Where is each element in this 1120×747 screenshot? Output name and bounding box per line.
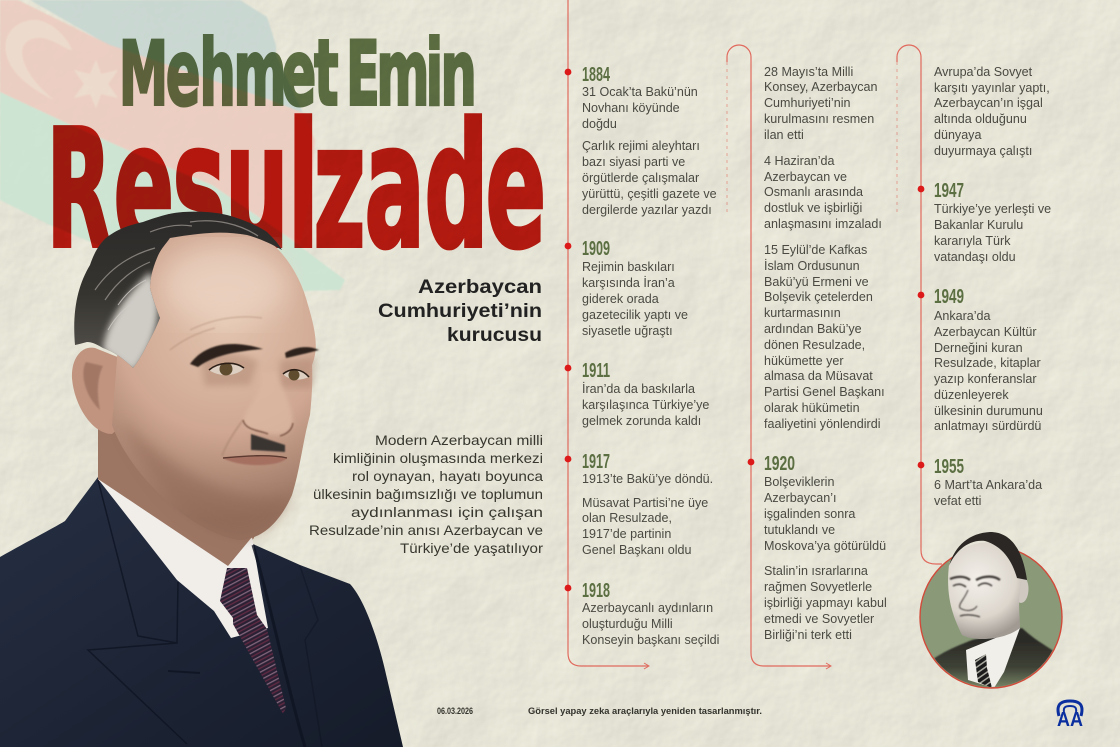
description paragraph: ülkesinin bağımsızlığı ve toplumun (313, 486, 543, 502)
mouth (223, 456, 287, 465)
1918: Azerbaycanlı aydınların (582, 601, 713, 615)
1918 continued: Bakü’yü Ermeni ve (764, 275, 869, 289)
1920: Azerbaycan’ı (764, 491, 837, 505)
1917: olan Resulzade, (582, 511, 672, 525)
1947: vatandaşı oldu (934, 250, 1016, 264)
face (112, 222, 316, 540)
1884: örgütlerde çalışmalar (582, 171, 699, 185)
1917: Genel Başkanı oldu (582, 543, 692, 557)
icon: AA logo: AA (1057, 709, 1083, 731)
1918 continued: dönen Resulzade, (764, 338, 865, 352)
1909: Rejimin baskıları (582, 260, 675, 274)
1918 continued: kurulmasını resmen (764, 112, 874, 126)
1918 continued: Konsey, Azerbaycan (764, 80, 877, 94)
1918 continued: hükümette yer (764, 354, 844, 368)
1918 continued: Partisi Genel Başkanı (764, 385, 885, 399)
collar and shirt (98, 479, 268, 638)
1955: 1955 (934, 456, 964, 478)
1909: 1909 (582, 238, 610, 260)
hair (949, 532, 1027, 580)
tie (975, 654, 992, 688)
subtitle: Azerbaycan (418, 276, 542, 298)
1949: ülkesinin durumunu (934, 404, 1043, 418)
1917: 1913’te Bakü’ye döndü. (582, 472, 713, 486)
cheek and jaw shading (120, 420, 292, 538)
1884: yürüttü, çeşitli gazete ve (582, 187, 717, 201)
lapels (88, 480, 322, 747)
1918 continued: anlaşmasını imzaladı (764, 217, 882, 231)
Azerbaijani flag watercolor (0, 0, 345, 292)
nose (243, 372, 293, 435)
1917: 1917’de partinin (582, 527, 671, 541)
circle (920, 546, 1062, 688)
1884: Çarlık rejimi aleyhtarı (582, 139, 700, 153)
portrait: Mehmet Emin Resulzade (0, 205, 403, 747)
ear (72, 348, 128, 434)
1918 continued: Cumhuriyeti’nin (764, 96, 850, 110)
1909 (582, 238, 688, 338)
neck (98, 420, 258, 568)
title: Resulzade: Resulzade (46, 88, 546, 287)
1920 continued (934, 65, 1050, 158)
subtitle: Cumhuriyeti’nin (378, 300, 542, 322)
1918 continued: Azerbaycan ve (764, 170, 847, 184)
1918 continued: almasa da Müsavat (764, 369, 873, 383)
1918 continued: Osmanlı arasında (764, 185, 863, 199)
description paragraph: Modern Azerbaycan milli (375, 432, 543, 448)
1955: vefat etti (934, 494, 981, 508)
1918 (582, 580, 719, 647)
1909: giderek orada (582, 292, 659, 306)
features (950, 577, 1000, 617)
title: Mehmet Emin: Mehmet Emin (119, 22, 477, 127)
1947: 1947 (934, 180, 964, 202)
1918: Konseyin başkanı seçildi (582, 633, 719, 647)
grey temple patch (103, 272, 158, 372)
subtitle (378, 276, 542, 346)
1884: doğdu (582, 117, 617, 131)
1949: Derneğini kuran (934, 341, 1023, 355)
1949: anlatmayı sürdürdü (934, 419, 1041, 433)
description paragraph: rol oynayan, hayatı boyunca (352, 468, 543, 484)
1955: 6 Mart’ta Ankara’da (934, 478, 1042, 492)
1920: 1920 (764, 453, 795, 475)
1947: Bakanlar Kurulu (934, 218, 1023, 232)
head (948, 542, 1020, 639)
1920: tutuklandı ve (764, 523, 835, 537)
description paragraph (309, 432, 543, 556)
description paragraph: aydınlanması için çalışan (351, 504, 543, 520)
timeline line: column 1 (568, 0, 649, 669)
1920 continued: Avrupa’da Sovyet (934, 65, 1033, 79)
suit (0, 477, 403, 747)
1920: Bolşeviklerin (764, 475, 834, 489)
1920: Moskova’ya götürüldü (764, 539, 886, 553)
1884: 31 Ocak’ta Bakü’nün (582, 85, 698, 99)
jacket (932, 628, 1055, 690)
1909: gazetecilik yaptı ve (582, 308, 688, 322)
1949 (934, 286, 1043, 433)
1884: Novhanı köyünde (582, 101, 680, 115)
1920 continued: karşıtı yayınlar yaptı, (934, 81, 1050, 95)
1955 (934, 456, 1042, 508)
description paragraph: kimliğinin oluşmasında merkezi (333, 450, 543, 466)
1949: Azerbaycan Kültür (934, 325, 1037, 339)
tie (220, 568, 286, 714)
1918 continued: Bolşevik çetelerden (764, 290, 873, 304)
1918 continued: ardından Bakü’ye (764, 322, 862, 336)
timeline column 1 (582, 64, 719, 647)
1911: 1911 (582, 360, 610, 382)
1920 (764, 453, 887, 642)
hair (74, 212, 282, 368)
1920: Stalin’in ısrarlarına (764, 564, 868, 578)
1920: etmedi ve Sovyetler (764, 612, 874, 626)
timeline line: column 3 (897, 45, 942, 564)
1949: 1949 (934, 286, 964, 308)
description paragraph: Türkiye’de yaşatılıyor (400, 540, 543, 556)
1884: bazı siyasi parti ve (582, 155, 685, 169)
1884: dergilerde yazılar yazdı (582, 203, 712, 217)
1920 continued: altında olduğunu (934, 112, 1027, 126)
1947 (934, 180, 1051, 264)
forehead and eye-socket shading (170, 317, 262, 456)
1918 continued: olarak hükümetin (764, 401, 860, 415)
1920 continued: dünyaya (934, 128, 981, 142)
1909: siyasetle uğraştı (582, 324, 673, 338)
1920 continued: Azerbaycan’ın işgal (934, 96, 1043, 110)
eyebrows (190, 344, 319, 367)
footer date: 06.03.2026 (437, 706, 473, 716)
1884 (582, 64, 717, 217)
mustache (251, 434, 285, 452)
1949: yazıp konferanslar (934, 372, 1037, 386)
1918 continued: kurtarmasının (764, 306, 841, 320)
1947: Türkiye’ye yerleşti ve (934, 202, 1051, 216)
1918: oluşturduğu Milli (582, 617, 673, 631)
1917 (582, 451, 713, 557)
1911: gelmek zorunda kaldı (582, 414, 701, 428)
1911: karşılaşınca Türkiye’ye (582, 398, 709, 412)
flag crescent and star (6, 20, 118, 108)
1918 continued: ilan etti (764, 128, 804, 142)
1918 continued: 15 Eylül’de Kafkas (764, 243, 867, 257)
timeline column 3 (934, 65, 1051, 508)
eyes (209, 363, 309, 380)
1920: Birliği’ni terk etti (764, 628, 852, 642)
1917: Müsavat Partisi’ne üye (582, 496, 708, 510)
1918 continued: İslam Ordusunun (764, 259, 860, 273)
ear (1014, 575, 1028, 603)
1918 continued: 4 Haziran’da (764, 154, 834, 168)
small circular portrait (920, 532, 1062, 690)
1920: işgalinden sonra (764, 507, 855, 521)
1918 continued: 28 Mayıs’ta Milli (764, 65, 853, 79)
1920 continued: duyurmaya çalıştı (934, 144, 1032, 158)
footer note: Görsel yapay zeka araçlarıyla yeniden tasarlanmıştır. (528, 706, 762, 716)
1947: kararıyla Türk (934, 234, 1011, 248)
1917: 1917 (582, 451, 610, 473)
1909: karşısında İran’a (582, 276, 675, 290)
timeline dots (565, 69, 924, 591)
timeline line: column 2 (727, 45, 831, 669)
1949: Resulzade, kitaplar (934, 356, 1041, 370)
1949: Ankara’da (934, 309, 991, 323)
shirt (966, 628, 1020, 688)
1918 continued (764, 65, 885, 431)
1918 continued: dostluk ve işbirliği (764, 201, 862, 215)
1918 continued: faaliyetini yönlendirdi (764, 417, 880, 431)
icon: AA logo (1057, 701, 1083, 731)
1920: rağmen Sovyetlerle (764, 580, 872, 594)
1920: işbirliği yapmayı kabul (764, 596, 887, 610)
timeline column 2 (764, 65, 887, 642)
1918: 1918 (582, 580, 610, 602)
1884: 1884 (582, 64, 611, 86)
1911 (582, 360, 709, 428)
subtitle: kurucusu (447, 324, 542, 346)
description paragraph: Resulzade’nin anısı Azerbaycan ve (309, 522, 543, 538)
1911: İran’da da baskılarla (582, 382, 695, 396)
1949: düzenleyerek (934, 388, 1009, 402)
